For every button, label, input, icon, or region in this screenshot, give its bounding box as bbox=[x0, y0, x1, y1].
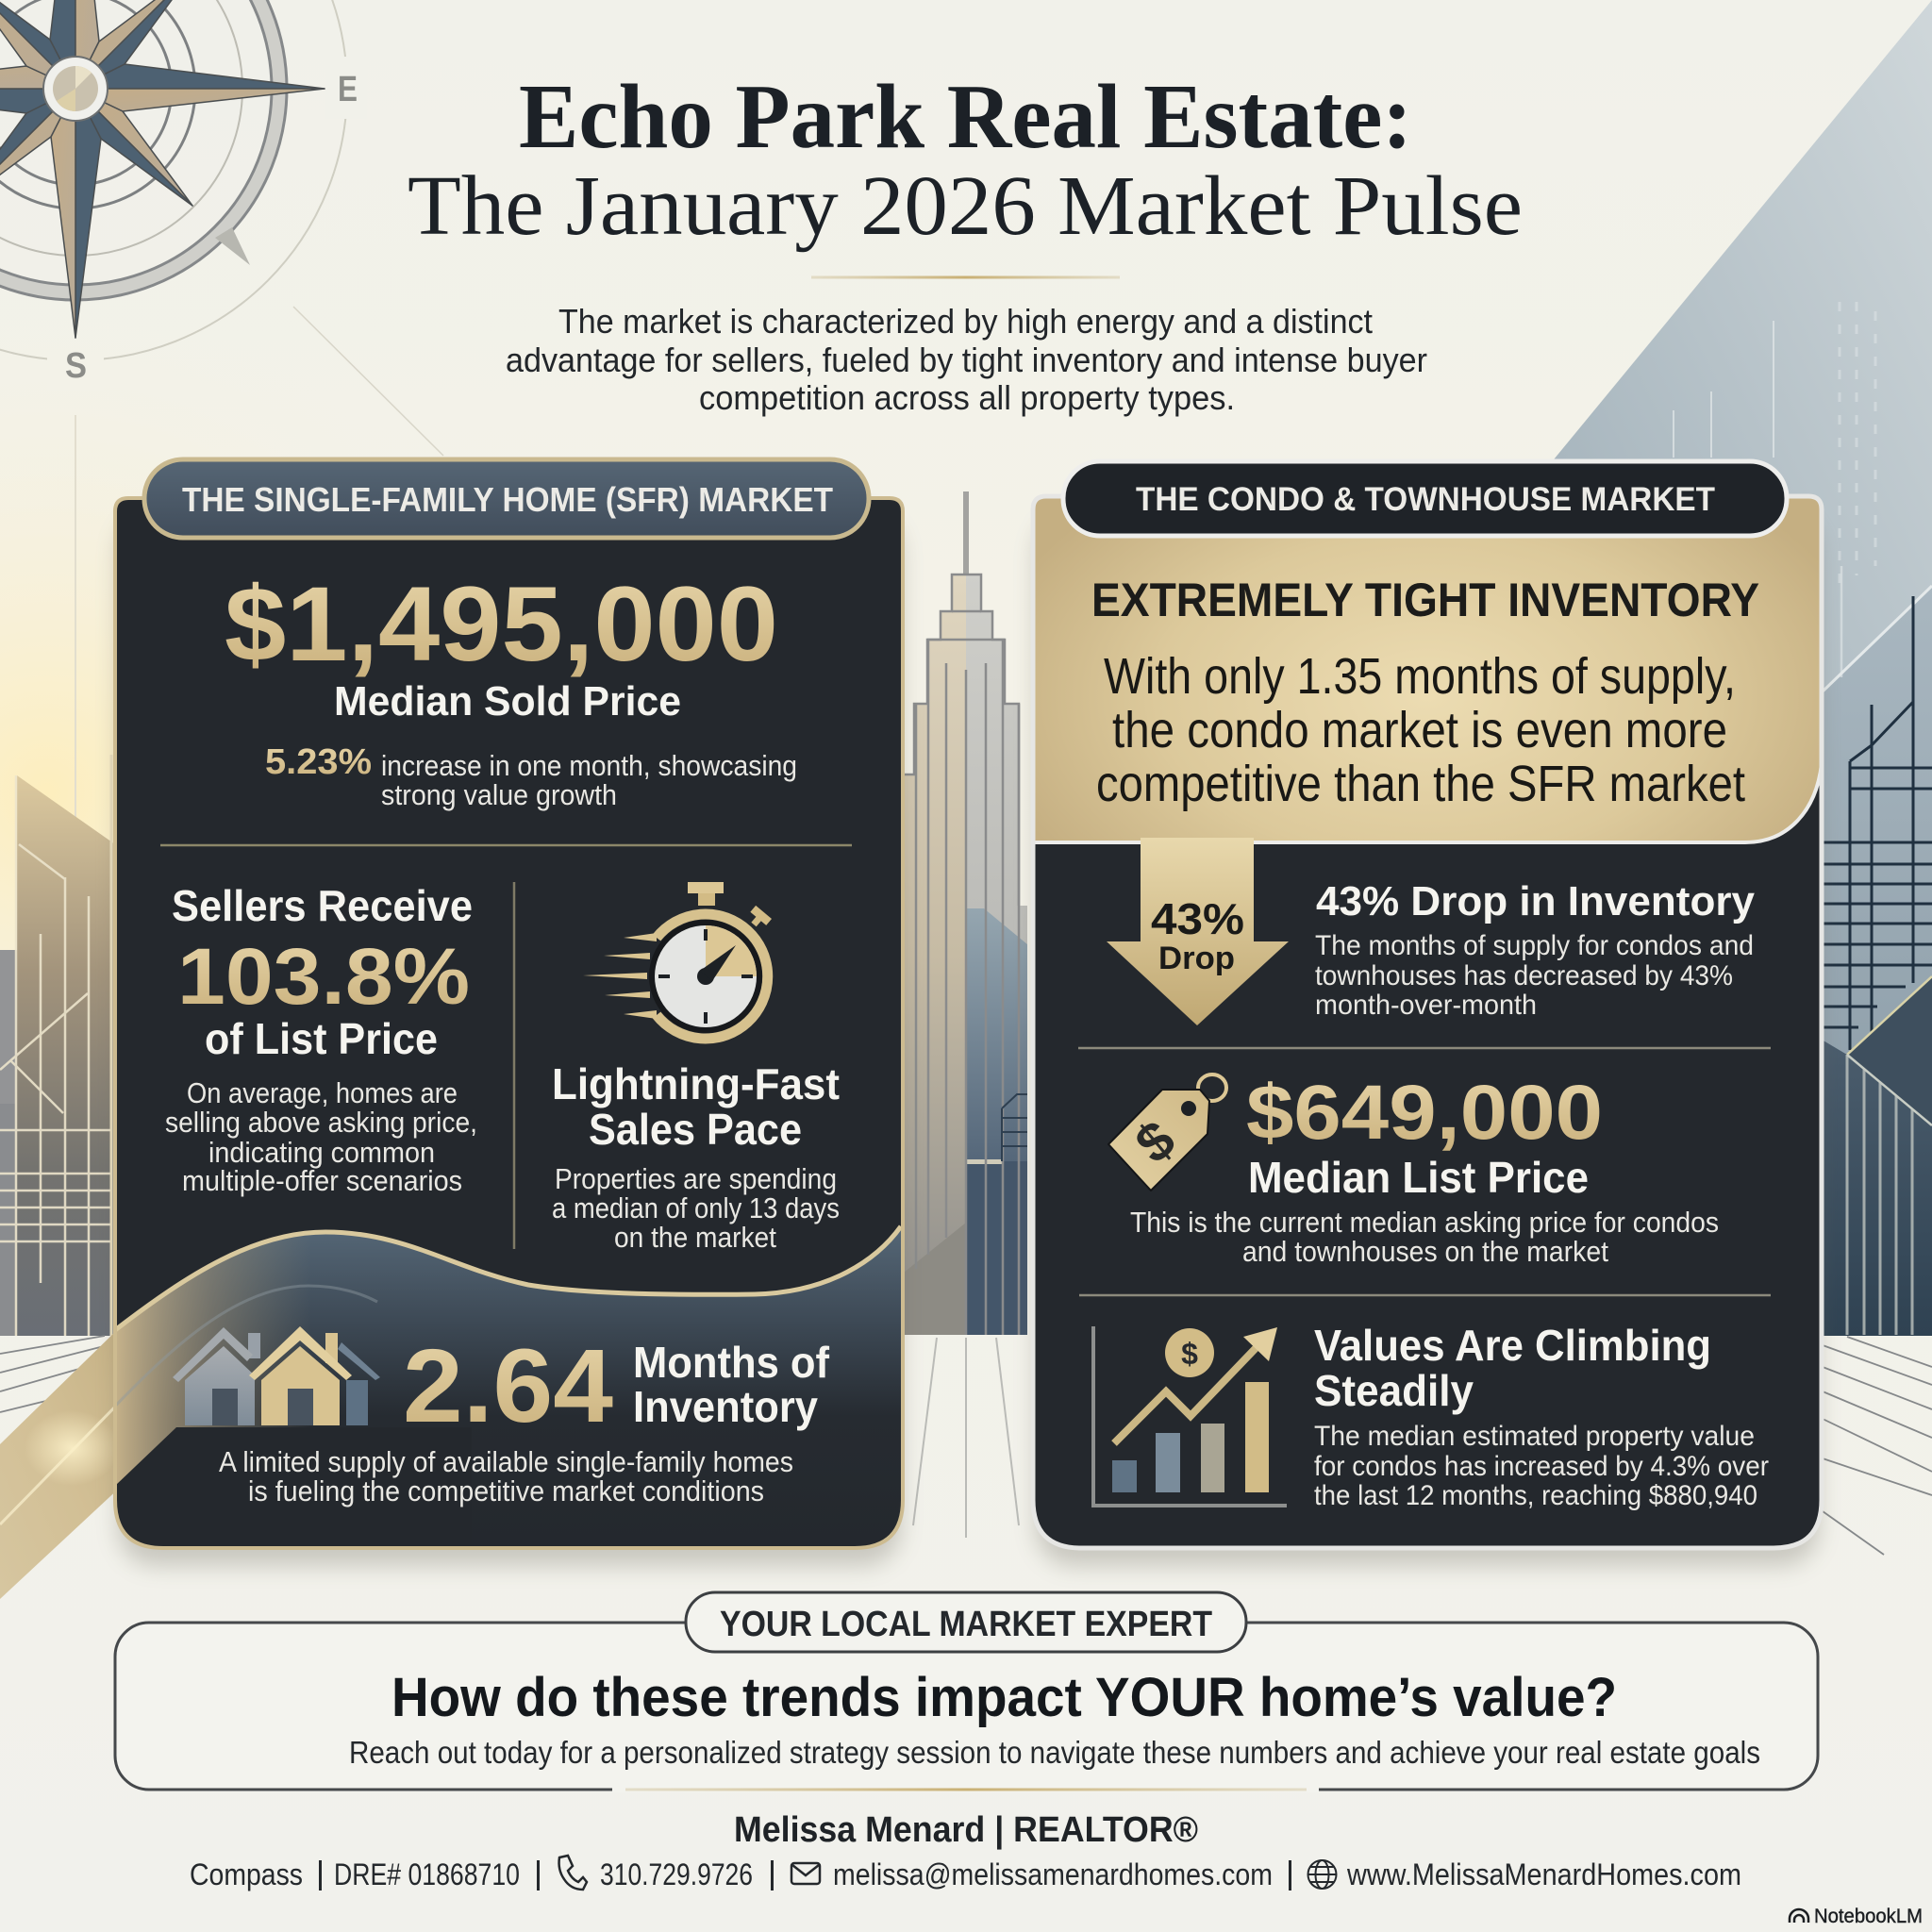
median list price stat: $649,000 bbox=[1246, 1070, 1603, 1156]
right skyline bbox=[1822, 566, 1932, 1336]
inventory drop stat: 43% Drop in Inventory bbox=[1316, 878, 1756, 924]
panel heading pill: THE SINGLE-FAMILY HOME (SFR) MARKET bbox=[182, 480, 833, 519]
gold inventory callout bbox=[1033, 496, 1822, 842]
agent name: Melissa Menard | REALTOR® bbox=[734, 1810, 1198, 1850]
panel: condo and townhouse market bbox=[1033, 461, 1822, 1548]
inventory drop stat: month-over-month bbox=[1315, 990, 1537, 1021]
gold inventory callout: competitive than the SFR market bbox=[1096, 756, 1745, 812]
call to action heading: How do these trends impact YOUR home’s value? bbox=[391, 1667, 1617, 1728]
intro text bbox=[506, 302, 1427, 417]
intro text: advantage for sellers, fueled by tight inventory and intense buyer bbox=[506, 341, 1427, 379]
arrow: 43% drop: Drop bbox=[1158, 941, 1235, 976]
heading pill bbox=[1063, 461, 1787, 536]
values climbing stat bbox=[1314, 1321, 1769, 1511]
left skyline bbox=[0, 755, 115, 1336]
contact row: 310.729.9726 bbox=[600, 1857, 753, 1891]
sales pace stat: Properties are spending bbox=[555, 1162, 837, 1195]
compass letter S: S bbox=[65, 346, 87, 386]
gold inventory callout: EXTREMELY TIGHT INVENTORY bbox=[1091, 574, 1759, 626]
median sold price: $1,495,000 bbox=[225, 565, 778, 683]
sales pace stat: Lightning-Fast bbox=[552, 1059, 840, 1108]
icon: stopwatch bbox=[583, 882, 772, 1039]
call to action text: Reach out today for a personalized strategy session to navigate these numbers and achieve your real estate goals bbox=[349, 1735, 1760, 1770]
months of inventory stat: is fueling the competitive market conditions bbox=[248, 1474, 764, 1507]
sales pace stat bbox=[552, 1059, 840, 1254]
icon: globe bbox=[1307, 1860, 1336, 1889]
heading pill: THE CONDO & TOWNHOUSE MARKET bbox=[1136, 481, 1715, 518]
sales pace stat: on the market bbox=[614, 1221, 776, 1254]
median sold price: increase in one month, showcasing bbox=[381, 749, 797, 782]
sales pace stat: Sales Pace bbox=[589, 1105, 802, 1154]
call to action badge bbox=[686, 1592, 1246, 1652]
icon: phone bbox=[559, 1856, 587, 1890]
values climbing stat: Steadily bbox=[1314, 1366, 1474, 1415]
median sold price bbox=[225, 565, 797, 811]
sales pace stat: a median of only 13 days bbox=[552, 1191, 840, 1224]
wave band bbox=[148, 1230, 901, 1406]
median list price stat: This is the current median asking price for condos bbox=[1130, 1206, 1719, 1239]
gold ribbon bbox=[0, 1324, 123, 1599]
median sold price: 5.23% bbox=[265, 742, 372, 782]
contact row: DRE# 01868710 bbox=[334, 1857, 520, 1891]
months of inventory stat: Inventory bbox=[633, 1382, 818, 1431]
contact row: www.MelissaMenardHomes.com bbox=[1346, 1857, 1741, 1891]
list price stat: On average, homes are bbox=[187, 1076, 458, 1109]
arrow: 43% drop bbox=[1107, 838, 1289, 1025]
values climbing stat: for condos has increased by 4.3% over bbox=[1314, 1451, 1769, 1482]
list price stat bbox=[165, 881, 477, 1197]
median sold price: Median Sold Price bbox=[334, 678, 681, 724]
values climbing stat: The median estimated property value bbox=[1314, 1421, 1755, 1452]
median list price stat: Median List Price bbox=[1248, 1153, 1589, 1202]
contact row bbox=[190, 1856, 1741, 1891]
compass rose bbox=[0, 0, 367, 391]
months of inventory stat: 2.64 bbox=[403, 1328, 613, 1444]
list price stat: multiple-offer scenarios bbox=[182, 1164, 462, 1197]
intro text: competition across all property types. bbox=[699, 378, 1235, 417]
months of inventory stat: A limited supply of available single-family homes bbox=[219, 1445, 793, 1478]
notebooklm mark: NotebookLM bbox=[1814, 1906, 1923, 1927]
arrow: 43% drop: 43% bbox=[1151, 894, 1244, 943]
compass letter E: E bbox=[338, 70, 358, 109]
panel heading pill bbox=[144, 459, 869, 538]
floor perspective lines bbox=[0, 1336, 1932, 1555]
inventory drop stat: The months of supply for condos and bbox=[1315, 930, 1754, 961]
title bbox=[408, 66, 1523, 253]
list price stat: of List Price bbox=[205, 1014, 438, 1063]
months of inventory stat bbox=[219, 1328, 830, 1507]
list price stat: 103.8% bbox=[177, 932, 470, 1021]
gold inventory callout: the condo market is even more bbox=[1112, 702, 1727, 758]
inventory drop stat: townhouses has decreased by 43% bbox=[1315, 960, 1733, 991]
title line 1: Echo Park Real Estate: bbox=[519, 66, 1412, 168]
icon: envelope bbox=[791, 1863, 820, 1884]
list price stat: selling above asking price, bbox=[165, 1106, 477, 1139]
months of inventory stat: Months of bbox=[633, 1338, 830, 1387]
icon: houses bbox=[173, 1326, 380, 1425]
panel: call to action bbox=[115, 1592, 1818, 1790]
title line 2: The January 2026 Market Pulse bbox=[408, 159, 1523, 253]
median list price stat: and townhouses on the market bbox=[1242, 1235, 1608, 1268]
list price stat: Sellers Receive bbox=[172, 881, 473, 930]
values climbing stat: Values Are Climbing bbox=[1314, 1321, 1711, 1370]
gold inventory callout: With only 1.35 months of supply, bbox=[1104, 648, 1736, 705]
contact row: melissa@melissamenardhomes.com bbox=[833, 1857, 1273, 1891]
chart icon: climbing values: $ bbox=[1181, 1337, 1198, 1371]
median list price stat bbox=[1130, 1070, 1719, 1268]
list price stat: indicating common bbox=[208, 1136, 435, 1169]
chart icon: climbing values bbox=[1093, 1326, 1287, 1506]
contact row: Compass bbox=[190, 1857, 303, 1891]
panel: single-family home market bbox=[104, 459, 906, 1557]
background: slate diagonal bbox=[1264, 0, 1932, 1336]
values climbing stat: the last 12 months, reaching $880,940 bbox=[1314, 1480, 1757, 1511]
median sold price: strong value growth bbox=[381, 778, 617, 811]
intro text: The market is characterized by high energy and a distinct bbox=[558, 302, 1373, 341]
inventory drop stat bbox=[1315, 878, 1756, 1021]
icon: price tag bbox=[1108, 1074, 1226, 1191]
icon: price tag: $ bbox=[1124, 1108, 1187, 1175]
central skyscraper bbox=[904, 491, 1027, 1335]
call to action badge: YOUR LOCAL MARKET EXPERT bbox=[720, 1605, 1212, 1644]
